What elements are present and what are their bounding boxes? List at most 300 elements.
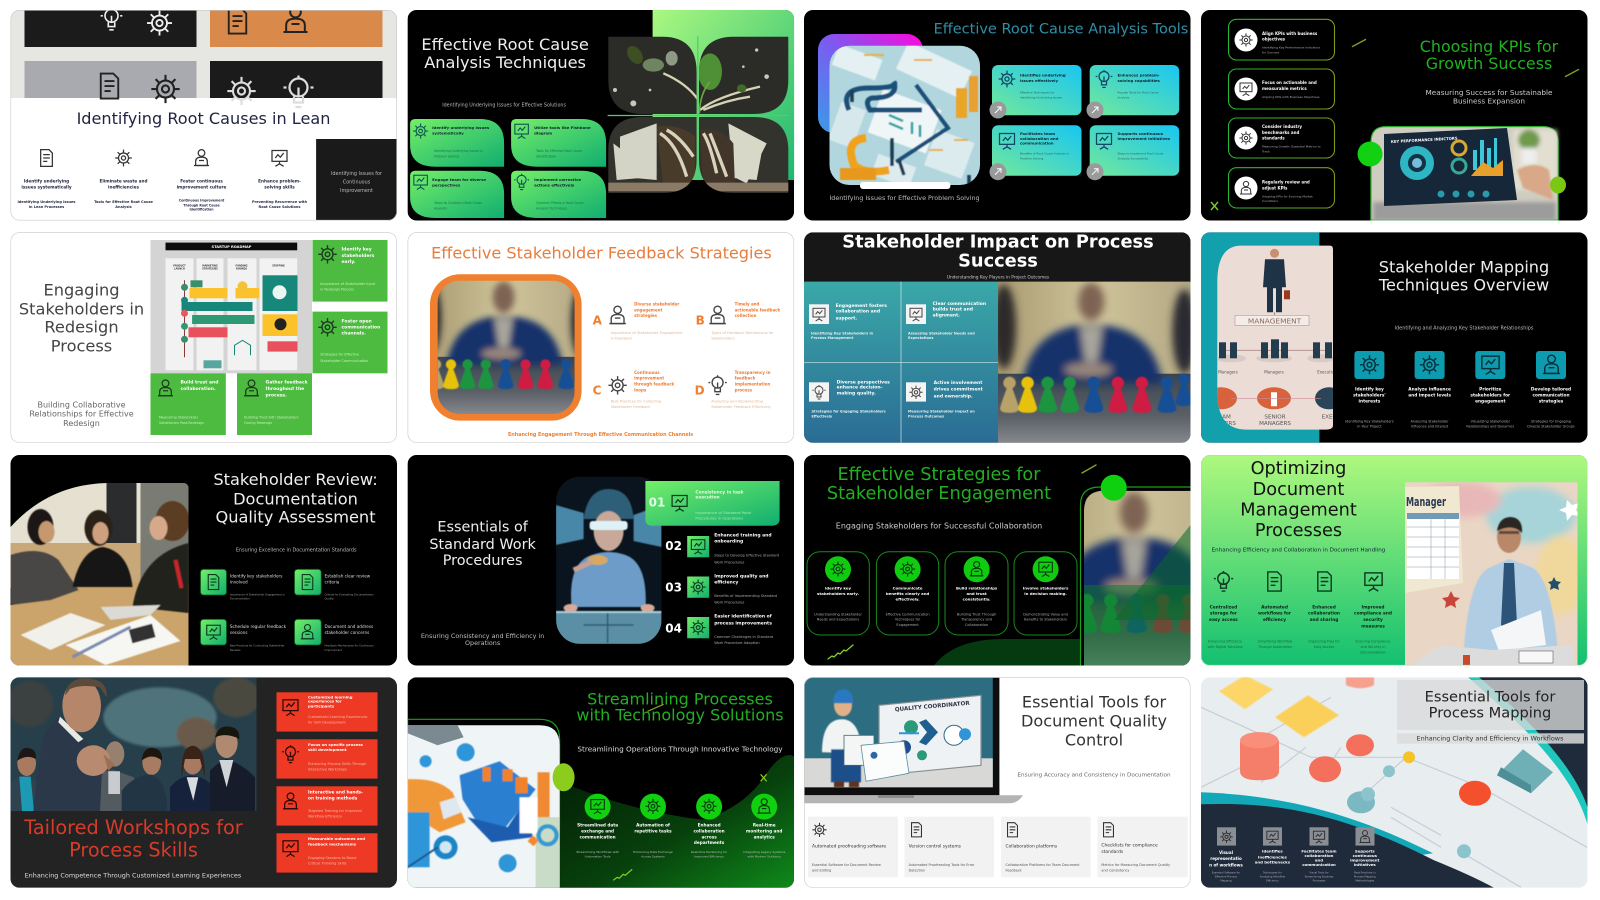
item text: four columns: Enhance problem-: [258, 179, 301, 184]
title: Effective Stakeholder Feedback Strategies: [431, 243, 772, 262]
dark callout box: Continuous: [343, 180, 371, 186]
teal grid: Diverse perspectives: [837, 379, 890, 385]
laptop KPI photo: [1371, 127, 1558, 221]
review items: Establish clear review: [324, 573, 371, 578]
red cards: Targeted Training for Improved: [307, 809, 362, 813]
photo in orange frame: [422, 274, 591, 421]
green backdrop: [653, 10, 795, 180]
org chart image: EXEC: [1322, 414, 1336, 420]
strategy descriptions: in Feedback: [611, 337, 633, 341]
KPI list cards: Focus on actionable and: [1262, 80, 1317, 85]
title: Processes: [1255, 521, 1342, 541]
review items: Improvement: [324, 648, 342, 652]
title: Document Quality: [1021, 712, 1167, 731]
tool text: [1209, 848, 1380, 883]
tool text: and: [1315, 857, 1323, 862]
panel: Choosing KPIs for Growth Success: [1201, 10, 1588, 221]
title: Documentation: [233, 489, 358, 508]
plant image petals: [607, 36, 790, 195]
column headings: workflows for: [1258, 610, 1292, 616]
steps 02 to 04: Easier identification of: [714, 613, 772, 619]
teal grid: Assessing Stakeholder Needs and: [908, 331, 975, 335]
red cards: Customized Learning Experiences: [308, 715, 368, 719]
green dot: [1101, 475, 1127, 501]
tool cards: Feedback: [1006, 868, 1022, 872]
strategy cards: benefits clearly and: [886, 591, 930, 596]
step 01 highlight card: 01: [649, 496, 665, 510]
green cards: Tools for Effective Root Cause: [535, 149, 582, 153]
steps 02 to 04: process improvements: [714, 620, 772, 626]
KPI list cards: [1228, 19, 1334, 208]
column descriptions: Easy Access: [1314, 645, 1334, 649]
item text: four columns: Continuous Improvement: [179, 199, 225, 203]
icons and columns: Identify key: [1355, 386, 1384, 392]
strategy cards: effectively.: [896, 597, 920, 602]
tool cards: and Consistency: [1101, 868, 1129, 872]
strategy cards: Needs and Expectations: [817, 617, 859, 621]
teal grid: alignment.: [933, 312, 960, 318]
strategy cards: Engagement: [896, 623, 919, 627]
teal cards: Identifies underlying: [1020, 73, 1066, 78]
tool cards: Automated Proofreading Tools for Error: [909, 863, 975, 867]
letter markers: C: [593, 383, 602, 397]
technology columns: Streamlining Workflows with: [576, 850, 619, 854]
green cards: Utilize tools like Fishbone: [534, 125, 591, 130]
steps 02 to 04: onboarding: [714, 539, 743, 545]
org chart image: SENIOR: [1264, 414, 1286, 420]
teal cards: issues effectively: [1020, 78, 1058, 83]
technology columns: Improved Efficiency: [694, 855, 724, 859]
column descriptions: and Security in: [1361, 645, 1385, 649]
teal grid: Active involvement: [934, 380, 983, 386]
letter markers: B: [696, 313, 705, 327]
teal grid: Expectations: [908, 336, 934, 340]
technology columns: across: [701, 834, 717, 839]
teal grid: [804, 282, 998, 443]
strategy headings: Diverse stakeholder: [634, 302, 679, 307]
subtitle: Ensuring Excellence in Documentation Standards: [236, 548, 357, 554]
teal grid: collaboration and: [836, 309, 880, 315]
KPI list cards: Identifying Key Performance Indicators: [1262, 46, 1321, 50]
technology columns: Automation of: [636, 823, 670, 828]
title: Process: [51, 336, 112, 355]
steps 02 to 04: Benefits of Implementing Standard: [714, 594, 777, 598]
icons and columns: Diverse Stakeholder Groups: [1527, 425, 1575, 429]
title: Effective Strategies for: [837, 465, 1041, 485]
column headings: measures: [1361, 623, 1385, 629]
tool text: and bottlenecks: [1255, 860, 1291, 865]
green stakeholder cards: channels.: [342, 330, 366, 336]
strategy cards: Involve stakeholders: [1023, 585, 1069, 590]
title: Stakeholder Engagement: [827, 484, 1051, 504]
teal cards: solving capabilities: [1118, 78, 1161, 83]
manager photo: Manager: [1406, 495, 1446, 509]
green stakeholder cards: stakeholders: [342, 253, 375, 259]
technology columns: Streamlined data: [577, 823, 618, 828]
tool text: initiatives: [1354, 862, 1376, 867]
accent marks: [1211, 39, 1579, 210]
strategy descriptions: Stakeholders: [711, 337, 735, 341]
technology columns: [576, 794, 786, 859]
item icons row: [41, 150, 287, 166]
strategy cards: Build relationships: [956, 585, 998, 590]
letter markers: [593, 313, 705, 397]
tool cards: Automated proofreading software: [812, 843, 886, 849]
technology columns: Enhancing Data Exchange: [633, 850, 673, 854]
title: Control: [1065, 730, 1123, 749]
title: Analysis Techniques: [424, 53, 586, 72]
tool text: continuous: [1353, 853, 1378, 858]
red cards: Enhancing Process Skills Through: [308, 762, 366, 766]
green cards: Identify underlying issues: [432, 125, 490, 130]
tool text: Visual: [1219, 850, 1234, 855]
panel: Stakeholder Impact on Process Success: [804, 232, 1197, 443]
laptop KPI photo: KEY PERFORMANCE INDICTORS: [1391, 136, 1458, 144]
KPI list cards: measurable metrics: [1262, 86, 1307, 91]
tool text: Facilitates team: [1301, 848, 1337, 853]
steps 02 to 04: 03: [665, 580, 682, 594]
strategy cards: in decision making.: [1024, 591, 1067, 596]
column headings: security: [1363, 617, 1383, 623]
startup roadmap image: ROUNDS: [236, 267, 247, 270]
teal grid: builds trust and: [933, 307, 973, 313]
red cards: Interactive and hands-: [308, 789, 363, 795]
title boxes: [1397, 680, 1584, 744]
org chart image: MANAGEMENT: [1248, 316, 1302, 325]
review items: Quality: [324, 597, 334, 601]
review items: Identify key stakeholders: [230, 573, 282, 578]
KPI list cards: standards: [1262, 136, 1285, 141]
strategy cards: [807, 552, 1077, 635]
icons and columns: in Your Project: [1357, 425, 1382, 429]
teal grid: and ownership.: [934, 394, 973, 400]
tool text: Efficiency: [1266, 879, 1279, 883]
startup roadmap image: STAFFING: [272, 264, 285, 267]
startup roadmap image: LAUNCH: [174, 267, 185, 270]
panel: Effective Stakeholder Feedback Strategies: [408, 232, 794, 443]
KPI list cards: Regularly review and: [1262, 180, 1310, 185]
subtitle: Relationships for Effective: [29, 410, 134, 419]
teal cards: improvement initiatives: [1118, 136, 1171, 141]
review items: [200, 569, 374, 652]
title: Stakeholder Mapping: [1379, 257, 1549, 276]
org chart image: [1205, 245, 1343, 430]
green cards: perspectives: [432, 183, 461, 188]
title: Quality Assessment: [215, 508, 376, 527]
panel: Essential Tools for Document Quality Control: [804, 677, 1190, 888]
steps 02 to 04: Steps to Develop Effective Standard: [714, 554, 779, 558]
dark callout box: Improvement: [340, 188, 373, 194]
red cards: Customized learning: [308, 694, 353, 699]
column descriptions: Ensuring Compliance: [1356, 639, 1390, 643]
KPI list cards: Aligning KPIs with Business Objectives: [1262, 95, 1320, 99]
item text: four columns: Identification: [190, 208, 214, 212]
manager photo: [1405, 482, 1586, 666]
step 01 highlight card: execution: [695, 495, 720, 501]
column headings: compliance and: [1354, 610, 1392, 616]
laptop illustration: [804, 677, 1023, 803]
title: Success: [958, 251, 1038, 272]
technology columns: Across Systems: [641, 855, 665, 859]
technology columns: departments: [694, 840, 725, 845]
icons: [1214, 571, 1382, 591]
tool text: Analyzing Workflow: [1260, 874, 1286, 878]
curved teal and navy corner shapes: [1201, 677, 1588, 888]
review items: criteria: [324, 579, 340, 584]
strategy descriptions: [611, 331, 774, 409]
red cards: Workflow Efficiency: [308, 815, 342, 819]
title: Procedures: [443, 553, 523, 569]
steps 02 to 04: Common Challenges in Standard: [714, 635, 773, 639]
startup roadmap image: MARKETING: [202, 264, 218, 267]
teal grid: Strategies for Engaging Stakeholders: [812, 409, 886, 413]
item text: four columns: in Lean Processes: [29, 205, 64, 209]
org chart image: LEADERS: [1210, 421, 1236, 427]
item text: four columns: Through Root Cause: [183, 203, 220, 207]
green cards: Analysis: [434, 206, 447, 210]
KPI list cards: Conditions: [1262, 199, 1278, 203]
item text: four columns: inefficiencies: [108, 185, 139, 190]
tool text: Identifies: [1262, 849, 1283, 854]
tool text: Best Practices in: [1354, 871, 1376, 875]
title: Streamlining Processes: [587, 689, 773, 708]
teal grid: Clear communication: [933, 301, 986, 307]
teal grid: Process Outcomes: [908, 414, 944, 418]
icons and columns: Strategies for Engaging: [1531, 419, 1571, 423]
title: Process Skills: [69, 839, 198, 862]
subtitle: Enhancing Efficiency and Collaboration in Document Handling: [1212, 548, 1386, 554]
title: Techniques Overview: [1378, 276, 1549, 295]
item text: four columns: Foster continuous: [180, 179, 223, 184]
steps 02 to 04: efficiency: [714, 580, 738, 586]
technology columns: Automation Tools: [585, 855, 611, 859]
teal grid: enhance decision-: [837, 384, 883, 390]
red cards: Focus on specific process: [308, 742, 364, 747]
strategy headings: process: [735, 387, 753, 392]
icons and columns: Identifying Key Stakeholders: [1345, 419, 1394, 423]
red cards: Engaging Sessions to Boost: [308, 856, 357, 860]
technology columns: Integrating Legacy Systems: [743, 850, 786, 854]
icons and columns: engagement: [1475, 398, 1506, 404]
startup roadmap image: FUNDING: [236, 264, 248, 267]
teal grid: Measuring Stakeholder Impact on: [908, 409, 975, 413]
steps 02 to 04: Work Procedures: [714, 560, 744, 564]
tool text: Mapping: [1220, 879, 1232, 883]
green stakeholder cards: Measuring Stakeholder: [159, 415, 199, 419]
column headings: Enhanced: [1312, 604, 1336, 610]
column headings: Automated: [1261, 604, 1288, 610]
review items: sessions: [230, 630, 248, 635]
KPI list cards: Measuring Growth: Essential Metrics to: [1262, 144, 1321, 148]
strategy cards: Techniques for: [894, 617, 921, 621]
startup roadmap image: PRODUCT: [173, 264, 186, 267]
strategy cards: stakeholders early.: [817, 591, 859, 596]
title: Essential Tools for: [1022, 692, 1166, 711]
title: Stakeholders in: [19, 299, 144, 318]
org chart image: TEAM: [1214, 414, 1231, 420]
icons and columns: [1345, 351, 1575, 429]
teal grid: Identifying Key Stakeholders in: [811, 331, 874, 335]
red cards: Critical Thinking Skills: [308, 861, 347, 865]
steps 02 to 04: Work Procedure Adoption: [714, 641, 760, 645]
title: Stakeholder Impact on Process: [842, 232, 1154, 253]
subtitle: Building Collaborative: [37, 401, 126, 410]
review items: stakeholder concerns: [324, 630, 369, 635]
title: Management: [1240, 501, 1357, 521]
technology columns: monitoring and: [746, 828, 782, 833]
steps 02 to 04: Improved quality and: [714, 573, 769, 579]
teal cards: collaboration and: [1020, 136, 1059, 141]
column headings: Centralized: [1210, 604, 1237, 610]
tool text: collaboration: [1305, 853, 1334, 858]
subtitle: Business Expansion: [1453, 96, 1525, 105]
tool cards: Detection: [909, 868, 925, 872]
strategy descriptions: Stakeholder Feedback: [611, 405, 651, 409]
tool text: Techniques for: [1263, 871, 1283, 875]
strategy headings: collection: [735, 313, 757, 318]
green stakeholder cards: in Redesign Process: [320, 288, 354, 292]
tool text: Visual Tools for: [1309, 871, 1330, 875]
green stakeholder cards: early.: [342, 259, 356, 265]
strategy cards: Benefits to Stakeholders: [1024, 617, 1067, 621]
red cards: Interactive Workshops: [308, 767, 347, 771]
subtitle: Ensuring Consistency and Efficiency in: [421, 632, 544, 640]
icons and columns: Influence and Interest: [1411, 425, 1449, 429]
dark callout box: Identifying Issues for: [331, 171, 383, 177]
tool text: Effective Process: [1215, 874, 1238, 878]
strategy headings: Transparency in: [735, 370, 771, 375]
panel: Tailored Workshops for Process Skills: [7, 677, 397, 888]
column descriptions: Documentation: [1360, 650, 1386, 654]
column descriptions: Enhancing Efficiency: [1208, 639, 1242, 643]
technology columns: repetitive tasks: [634, 828, 672, 833]
subtitle: Ensuring Accuracy and Consistency in Documentation: [1017, 773, 1171, 779]
column headings: easy access: [1209, 618, 1238, 623]
futuristic portrait photo: [556, 476, 662, 644]
item text: four columns: Eliminate waste and: [100, 179, 147, 184]
teal cards: [990, 65, 1179, 180]
column headings: Improved: [1361, 604, 1385, 610]
KPI list cards: benchmarks and: [1262, 130, 1299, 135]
tool cards: Collaborative Platforms for Team Document: [1006, 863, 1080, 867]
strategy cards: Understanding Stakeholder: [814, 612, 862, 616]
panel: Essential Tools for Process Mapping: [1201, 675, 1588, 888]
subtitle: Engaging Stakeholders for Successful Collaboration: [836, 522, 1042, 531]
tool text: Supports: [1355, 848, 1375, 853]
review items: Documentation: [230, 597, 250, 601]
tool text: n of workflows: [1209, 863, 1243, 868]
technology columns: with Modern Solutions: [748, 855, 781, 859]
title: Essentials of: [437, 520, 529, 536]
title boxes: Enhancing Clarity and Efficiency in Workflows: [1417, 734, 1564, 742]
teal cards: Effective Techniques for: [1020, 91, 1055, 95]
teal cards: Supports continuous: [1118, 131, 1164, 136]
strategy cards: Communicate: [893, 585, 923, 590]
org chart image: Managers: [1218, 369, 1238, 374]
red cards: Measurable outcomes and: [308, 836, 365, 841]
teal cards: Enhances problem-: [1118, 73, 1160, 78]
strategy cards: and trust: [966, 591, 987, 596]
green stakeholder cards: Stakeholder Communication: [320, 359, 368, 363]
review items: Importance of Stakeholder Engagement in: [230, 592, 285, 596]
review items: Best Practices for Conducting Stakeholder: [230, 644, 285, 648]
item text: four columns: improvement culture: [177, 185, 227, 190]
icons and columns: interests: [1359, 398, 1381, 404]
green cards: Identification: [536, 154, 556, 158]
column descriptions: Simplifying Workflow: [1258, 639, 1293, 643]
icons and columns: stakeholders': [1353, 392, 1386, 398]
startup roadmap image: STRATEGIES: [202, 267, 218, 270]
teal cards: Identifying Underlying Issues: [1020, 96, 1062, 100]
panel: Engaging Stakeholders in Redesign Process: [10, 232, 397, 443]
green cards: Steps to Conduct a Root Cause: [434, 201, 482, 205]
icons and columns: Analyze influence: [1408, 386, 1451, 392]
tool icons: [1217, 827, 1374, 846]
meeting photo: [10, 483, 190, 666]
strategy descriptions: Importance of Stakeholder Engagement: [611, 331, 683, 335]
teal grid: drives commitment: [934, 387, 984, 393]
strategy cards: Demonstrating Value and: [1023, 612, 1068, 616]
tool text: representatio: [1210, 856, 1242, 861]
strategy cards: Effective Communication: [886, 612, 930, 616]
org chart image: Executive: [1317, 369, 1337, 374]
green stakeholder cards: Strategies for Effective: [320, 353, 359, 357]
green stakeholder cards: process.: [266, 392, 287, 398]
panel: Essentials of Standard Work Procedures: [408, 455, 794, 666]
green stakeholder cards: During Redesign: [244, 421, 272, 425]
green stakeholder cards: Satisfaction Post-Redesign: [159, 421, 204, 425]
letter markers: D: [695, 383, 705, 397]
technology columns: exchange and: [581, 828, 614, 833]
review items: Reviews: [230, 648, 241, 652]
title: Growth Success: [1426, 54, 1552, 73]
tool text: communication: [1302, 862, 1336, 867]
green stakeholder cards: Identify key: [342, 247, 372, 253]
green stakeholder cards: Gather feedback: [266, 380, 309, 386]
accent marks: [613, 704, 767, 880]
KPI list cards: Consider industry: [1262, 124, 1302, 129]
title: with Technology Solutions: [576, 706, 784, 725]
green cards: diagram: [534, 131, 552, 136]
KPI list cards: Adapting KPIs for Evolving Market: [1262, 194, 1314, 198]
title: Effective Root Cause: [421, 35, 589, 54]
strategy headings: Continuous: [634, 370, 660, 375]
strategy headings: strategies: [634, 313, 658, 318]
step 01 highlight card: Importance of Standard Work: [695, 510, 752, 515]
review items: Criteria for Evaluating Documentation: [324, 592, 374, 596]
technology columns: Enhanced: [698, 823, 721, 828]
strategy headings: improvement: [634, 376, 664, 381]
green cards: Engage team for diverse: [432, 177, 486, 182]
tool text: improvement: [1350, 857, 1380, 862]
tool cards: Metrics for Measuring Document Quality: [1101, 863, 1170, 867]
green cards: actions effectively: [534, 183, 575, 188]
KPI list cards: for Success: [1262, 50, 1280, 54]
strategy cards: Transparency and: [960, 617, 992, 621]
red cards: skill development: [308, 747, 347, 752]
red cards: for Skill Development: [308, 720, 346, 724]
green cards: Analysis Techniques: [536, 206, 567, 210]
teal cards: Problem Solving: [1020, 157, 1043, 161]
steps 02 to 04: 02: [665, 539, 682, 553]
green stakeholder cards: Importance of Stakeholder Input: [320, 282, 376, 286]
teal cards: Analysis Successfully: [1118, 157, 1148, 161]
strategy headings: engagement: [634, 307, 663, 312]
step 01 highlight card: Procedures in Operations: [695, 515, 743, 520]
footer: Enhancing Engagement Through Effective Communication Channels: [508, 432, 693, 438]
strategy headings: implementation: [735, 382, 770, 387]
strategy descriptions: Analyzing and Implementing: [711, 399, 763, 403]
